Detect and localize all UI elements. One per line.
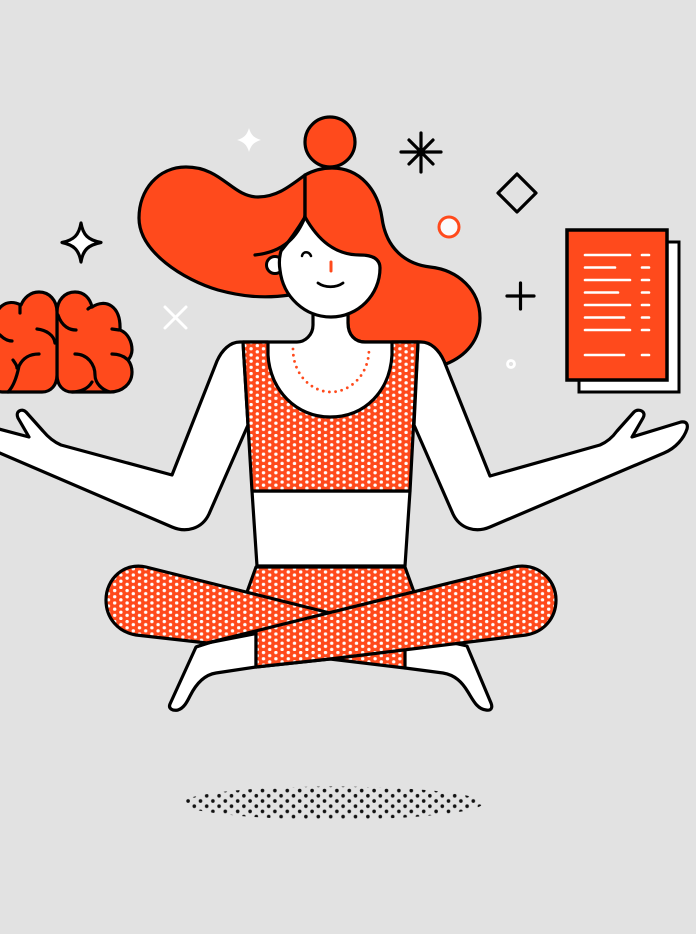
nose: [330, 262, 332, 271]
inner thigh edge: [254, 632, 258, 667]
tank top: [243, 342, 418, 491]
left leg: [106, 566, 330, 643]
icon: document stack: [567, 230, 679, 392]
left brain lobe: [0, 292, 57, 392]
icon: white cross: [165, 307, 186, 328]
neck outline: [243, 315, 418, 342]
pants seat: [240, 567, 420, 668]
back sheet: [579, 242, 679, 392]
floor shadow: [183, 786, 483, 820]
necklace: [293, 349, 369, 392]
eye: [302, 252, 311, 256]
hair bun: [305, 117, 355, 167]
document text lines: [585, 255, 649, 355]
ear: [266, 256, 284, 274]
icon: orange ring: [439, 217, 459, 237]
face: [255, 175, 380, 317]
icon: black sparkle: [62, 223, 101, 262]
icon: black asterisk: [401, 133, 441, 172]
hair: flowing left: [139, 167, 305, 297]
right arm: [414, 342, 687, 530]
icon: white sparkle: [237, 128, 261, 152]
right brain lobe: [57, 292, 132, 392]
icon: small white ring: [508, 360, 514, 368]
neck and chest: [262, 312, 400, 420]
right leg: [207, 566, 556, 668]
bare waist: [252, 491, 410, 566]
icon: plus: [507, 283, 534, 309]
front sheet: [567, 230, 667, 380]
hair line over forehead: [255, 175, 305, 255]
head: [279, 217, 380, 317]
hair: flowing right: [305, 168, 480, 364]
right leg outline: [196, 566, 556, 667]
left arm: [0, 342, 248, 530]
mouth: [318, 283, 343, 287]
left foot: [170, 628, 256, 710]
right foot: [405, 640, 492, 710]
icon: brain: [0, 292, 132, 392]
icon: diamond: [498, 174, 536, 212]
